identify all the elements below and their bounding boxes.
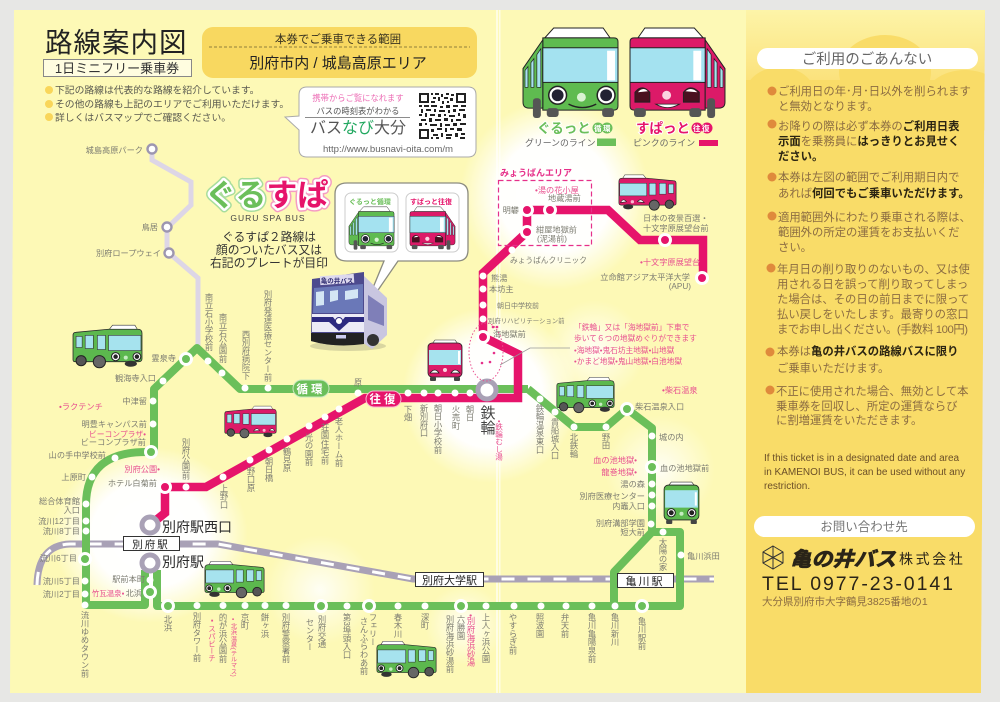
hub labels: 別府駅 (162, 554, 204, 570)
horizontal stop labels: 別府医療センター (579, 491, 645, 501)
horizontal stop labels: 別府ロープウェイ (96, 249, 161, 258)
Kijima line stops (148, 144, 174, 258)
vertical stop labels: 弁天前 (560, 612, 570, 639)
lavender line to Kijima Kogen (152, 150, 198, 348)
horizontal stop labels: 血の池地獄前 (660, 463, 709, 473)
green line caption: ぐるっと (537, 121, 591, 136)
guide rules list: 乗車券を回収し、所定の運賃ならび (776, 399, 958, 413)
horizontal stop labels: 柴石温泉入口 (635, 402, 684, 412)
guide rules list (766, 84, 971, 427)
guide rules list: 用される日を誤って削り取ってしまっ (777, 277, 968, 291)
vertical stop labels: 荘園住宅前 (320, 422, 330, 466)
horizontal stop labels: 中津留 (122, 396, 147, 406)
railway station box: Beppu (124, 536, 180, 551)
pink side bus, Myoban (619, 175, 676, 210)
vertical stop labels: 別府公園前 (181, 438, 191, 481)
loop badge (293, 380, 329, 397)
green side bus, bottom (377, 641, 436, 678)
horizontal stop labels: 別府溝部学園 (596, 518, 645, 528)
valid area panel: 本券でご乗車できる範囲 (275, 32, 401, 46)
guide rules list: た場合は、その日の前日までに限って (777, 292, 969, 306)
guide rules list: 示面を乗務員にはっきりとお見せく (778, 134, 960, 148)
pink ring stops (160, 204, 708, 492)
hell tour note: •かまど地獄•鬼山地獄•白池地獄 (574, 356, 682, 366)
plate explanation text: 右記のプレートが目印 (210, 256, 328, 270)
English note: restriction. (764, 481, 810, 492)
hell tour note: 「鉄輪」又は「海地獄前」下車で (574, 322, 690, 332)
telephone number: TEL 0977-23-0141 (762, 573, 953, 595)
horizontal stop labels: 流川8丁目 (43, 526, 80, 536)
guide heading (757, 48, 978, 69)
big green face bus (523, 28, 618, 118)
guide rules list: 本券は左図の範囲でご利用期日内で (778, 170, 960, 184)
horizontal stop labels: 流川12丁目 (38, 516, 80, 526)
vertical stop labels: 的が浜公園前 (218, 612, 228, 664)
pink spot labels: 血の池地獄• (593, 455, 637, 465)
horizontal stop labels: (泥湯前) (537, 234, 567, 244)
vertical stop labels: 深町 (420, 613, 430, 630)
horizontal stop labels: 霊泉寺 (151, 353, 176, 363)
white glow areas behind the map (52, 10, 715, 693)
vertical stop labels: 流川ゆめタウン前 (80, 610, 90, 678)
icon: company hexagon logo (763, 546, 783, 569)
vertical stop labels: 原 (353, 378, 363, 386)
pink spot labels: •柴石温泉 (662, 385, 698, 395)
big pink face bus (630, 28, 725, 118)
horizontal stop labels: 明豊キャンパス前 (81, 419, 147, 429)
pink spot labels: •湯の花小屋 (535, 185, 579, 195)
horizontal stop labels: (APU) (669, 282, 691, 291)
plate speech bubble (335, 183, 468, 312)
guide rules list: 範囲外の所定の運賃をお支払いくだ (778, 225, 960, 239)
vertical stop labels: 上野口 (219, 484, 229, 509)
horizontal stop labels: 入口 (64, 506, 80, 515)
valid area panel (202, 27, 477, 78)
pink spot labels: 龍巻地獄• (601, 467, 637, 477)
icon: QR code (419, 93, 466, 139)
vertical stop labels: 六勝園 (456, 614, 466, 641)
pink line caption: ピンクのライン (633, 138, 695, 148)
vertical stop labels: 朝日橋 (264, 457, 274, 483)
out and back badge: 往復 (370, 392, 398, 406)
hub labels: 別府駅西口 (162, 519, 232, 535)
bus navi callout: バスの時刻表がわかる (317, 106, 399, 116)
Guru Spa logo: ぐるすぱ (205, 178, 328, 213)
bus navi callout (285, 87, 476, 157)
pink side bus (225, 406, 276, 438)
vertical stop labels: 鶴見原 (282, 446, 292, 472)
vertical stop labels: 亀川新川 (610, 612, 620, 646)
vertical stop labels: センター (305, 618, 315, 651)
vertical stop labels: 南立石小学校前 (204, 292, 214, 352)
vertical stop labels: 西別府病院下 (241, 330, 251, 381)
bus photo (310, 272, 387, 351)
pink spot labels: 竹瓦温泉▪ (92, 589, 125, 598)
pink spot labels: ▪北浜温泉(テルマス) (230, 616, 237, 677)
Tetsuwa hub label: 鉄輪 (478, 405, 496, 435)
railway station box: Kamegawa (618, 574, 674, 588)
railway station box: Kamegawa: 亀川駅 (626, 574, 664, 588)
vertical stop labels: 北鉄輪 (569, 433, 579, 459)
vertical stop labels: 別府海浜砂湯前 (445, 615, 455, 674)
vertical stop labels: 火売町 (451, 405, 461, 430)
bus navi callout: バスなび大分 (310, 119, 406, 137)
plate explanation text: 顔のついたバス又は (216, 243, 322, 257)
pink spot labels: •鉄輪むし湯 (494, 420, 504, 462)
pink spot labels: ビーコンプラザ• (89, 430, 146, 439)
hell tour note: 歩いて６つの地獄めぐりができます (574, 333, 697, 343)
guide rules list: 年月日の削り取りのないもの、又は使 (777, 262, 970, 276)
horizontal stop labels: 日本の夜景百選・ (643, 213, 709, 223)
vertical stop labels: 亀川亀陽泉前 (587, 612, 597, 664)
pink spot labels: 別府公園• (124, 465, 160, 474)
logo caption: GURU SPA BUS (230, 213, 306, 223)
horizontal stop labels: 湯の森 (620, 479, 646, 489)
horizontal stop labels: 城島高原パーク (86, 145, 143, 155)
vertical stop labels: 光の園前 (304, 432, 314, 467)
vertical stop labels: フェリー (368, 613, 378, 646)
title: 路線案内図 (45, 27, 188, 58)
guide rules list: ご利用日の年･月･日以外を削られます (778, 84, 971, 98)
vertical stop labels: 春木川 (393, 612, 403, 638)
horizontal stop labels: 北浜 (126, 588, 142, 598)
bus navi callout: http://www.busnavi-oita.com/m (323, 144, 453, 155)
panel: usage guide (744, 10, 1000, 693)
vertical stop labels: 別府交通 (317, 615, 327, 649)
guide rules list: 適用範囲外にわたり乗車される際は、 (778, 210, 971, 224)
English note (764, 453, 965, 492)
green front bus, Kamegawa (664, 482, 699, 524)
horizontal stop labels: 地蔵湯前 (548, 193, 581, 203)
horizontal stop labels: ビーコンプラザ前 (81, 437, 146, 447)
green line: loop route (86, 348, 680, 606)
English note: If this ticket is in a designated date and area (764, 453, 960, 464)
Myoban area box (498, 167, 592, 246)
horizontal stop labels: 鳥居 (142, 222, 158, 232)
railway station box: Beppu Daigaku (416, 572, 484, 587)
vertical stop labels: 老人ホーム前 (334, 416, 344, 468)
company name: 株式会社 (899, 551, 965, 567)
bus photo: 亀の井バス (321, 276, 353, 285)
horizontal stop labels: 流川6丁目 (40, 553, 77, 563)
horizontal stop labels: 短大前 (620, 527, 645, 537)
green side bus, Beppu station (205, 561, 264, 598)
horizontal stop labels: みょうばんクリニック (510, 256, 587, 265)
intro bullet notes: 下記の路線は代表的な路線を紹介しています。 (55, 84, 259, 96)
horizontal stop labels: 駅前本町 (112, 574, 145, 584)
pink spot labels: •別府海浜砂湯 (466, 614, 476, 668)
hub labels (162, 519, 232, 570)
vertical stop labels: 照波園 (535, 613, 545, 639)
pink front bus, Tetsuwa (428, 340, 462, 381)
guide rules list: に割増運賃をいただきます。 (776, 413, 922, 427)
green stops (82, 358, 684, 610)
horizontal stop labels: 城の内 (659, 432, 684, 442)
vertical stop labels: 新別府口 (419, 404, 429, 437)
loop badge: 循環 (296, 382, 326, 396)
guide rules list: あれば何回でもご乗車いただけます。 (778, 186, 970, 200)
horizontal stop labels: ホテル白菊前 (108, 478, 157, 488)
hell tour note: •海地獄•鬼石坊主地獄•山地獄 (574, 345, 675, 355)
horizontal stop labels: 海地獄前 (493, 329, 526, 339)
vertical stop labels: 別府警察署前 (281, 613, 291, 664)
guide rules list: さい。 (778, 241, 812, 254)
vertical stop labels: 別府タワー前 (192, 612, 202, 663)
contact heading: お問い合わせ先 (820, 520, 908, 534)
guide rules list: お降りの際は必ず本券のご利用日表 (778, 119, 960, 133)
horizontal stop labels: 観海寺入口 (115, 373, 156, 383)
hell area dotted ellipse (469, 323, 570, 381)
vertical stop labels: 亀川駅前 (637, 616, 647, 651)
intro bullet notes (45, 84, 289, 124)
horizontal stop labels: 内竈入口 (612, 501, 645, 511)
horizontal stop labels: 紺屋地獄前 (536, 224, 577, 234)
vertical stop labels: 上人ヶ浜公園 (481, 613, 491, 664)
vertical stop labels: 第3埠頭入口 (342, 612, 352, 659)
railway station box: Beppu: 別府駅 (132, 539, 170, 551)
transfer hubs (142, 381, 496, 571)
horizontal stop labels (38, 145, 720, 599)
green side bus, Tetsuwa (557, 377, 614, 413)
intro bullet notes: その他の路線も上記のエリアでご利用いただけます。 (55, 98, 289, 110)
vertical stop labels: 別府発達医療センター前 (263, 290, 273, 382)
horizontal stop labels: 立命館アジア太平洋大学 (600, 272, 690, 282)
pink spot labels: ▪スパビーチ (208, 616, 216, 662)
horizontal stop labels: 上原町 (61, 473, 86, 482)
green line caption: 循環 (594, 123, 612, 133)
paper background (10, 10, 746, 693)
railway line (37, 544, 714, 585)
guide rules list: と無効となります。 (778, 99, 879, 113)
horizontal stop labels: 流川5丁目 (43, 576, 80, 586)
guide heading: ご利用のごあんない (802, 51, 932, 68)
address: 大分県別府市大字鶴見3825番地の1 (762, 595, 928, 608)
horizontal stop labels: 流川2丁目 (43, 589, 80, 599)
out and back badge (366, 391, 401, 407)
pink line caption (633, 121, 718, 148)
vertical stop labels: 北浜 (163, 615, 173, 633)
company name: 亀の井バス (790, 548, 897, 571)
horizontal stop labels: 別府リハビリテーション前 (488, 316, 565, 325)
vertical stop labels: 太陽の家 (658, 537, 668, 572)
hell tour note (574, 322, 697, 366)
horizontal stop labels: 十文字原展望台前 (643, 223, 709, 233)
Myoban area box: みょうばんエリア (500, 167, 572, 178)
pink stops (182, 246, 516, 490)
pink spot labels (59, 185, 700, 677)
vertical stop labels (80, 290, 668, 678)
pink plate: すぱっと往復 (410, 197, 452, 206)
vertical stop labels: 朝日小学校前 (433, 404, 443, 455)
green side bus, west (73, 325, 142, 368)
horizontal stop labels: 総合体育館 (39, 496, 80, 506)
vertical stop labels: 朝日 (465, 405, 475, 423)
pink spot labels: •十文字原展望台 (640, 257, 700, 267)
ticket name box: 1日ミニフリー乗車券 (55, 61, 179, 76)
plate explanation text: ぐるすぱ２路線は (222, 230, 316, 244)
green line caption (525, 121, 616, 148)
vertical stop labels: 野田 (601, 433, 611, 451)
horizontal stop labels: 亀川浜田 (687, 551, 720, 561)
vertical stop labels: やすらぎ前 (508, 613, 518, 656)
vertical stop labels: 京町 (240, 613, 250, 630)
guide rules list: 不正に使用された場合、無効として本 (776, 384, 969, 398)
guide rules list: ださい。 (778, 150, 823, 163)
intro bullet notes: 詳しくはバスマップでご確認ください。 (55, 111, 231, 124)
pink line caption: 往復 (693, 123, 711, 133)
guide rules list: ご乗車いただけます。 (777, 361, 889, 375)
bus navi callout: 携帯からご覧になれます (312, 93, 404, 103)
valid area panel: 別府市内 / 城島高原エリア (249, 55, 427, 72)
vertical stop labels: 南立石公園前 (218, 312, 228, 364)
Guru Spa logo: ぐるすぱ (205, 178, 328, 213)
company name (792, 548, 962, 568)
vertical stop labels: 貴船城入口 (550, 417, 560, 460)
green line caption: グリーンのライン (525, 137, 596, 148)
horizontal stop labels: 山の手中学校前 (49, 450, 106, 460)
vertical stop labels: 野口原 (246, 467, 256, 492)
English note: in KAMENOI BUS, it can be used without any (764, 467, 965, 478)
guide rules list: までお申し出ください。(手数料 100円) (777, 322, 968, 336)
green plate: ぐるっと循環 (349, 197, 391, 206)
horizontal stop labels: 明礬 (503, 205, 519, 215)
horizontal stop labels: 本坊主 (489, 284, 514, 294)
guide rules list: 本券は亀の井バスの路線バスに限り (777, 344, 958, 358)
pink line: out and back route (150, 210, 703, 525)
vertical stop labels: さんふらわあ前 (359, 617, 369, 676)
pink line caption: すぱっと (636, 121, 690, 136)
pink spot labels: •ラクテンチ (59, 402, 103, 412)
vertical stop labels: 餅ヶ浜 (260, 612, 270, 639)
contact heading (754, 516, 975, 537)
green ring stops (80, 354, 658, 612)
plate explanation text (210, 230, 328, 270)
railway station box: Beppu Daigaku: 別府大学駅 (422, 573, 477, 587)
guide rules list: 払い戻しをいたします。最寄りの窓口 (777, 307, 969, 321)
horizontal stop labels: 朝日中学校前 (497, 301, 539, 310)
vertical stop labels: 下畑 (403, 405, 413, 423)
vertical stop labels: 鉄輪温泉東口 (535, 403, 545, 454)
horizontal stop labels: 熊湯 (491, 273, 507, 283)
